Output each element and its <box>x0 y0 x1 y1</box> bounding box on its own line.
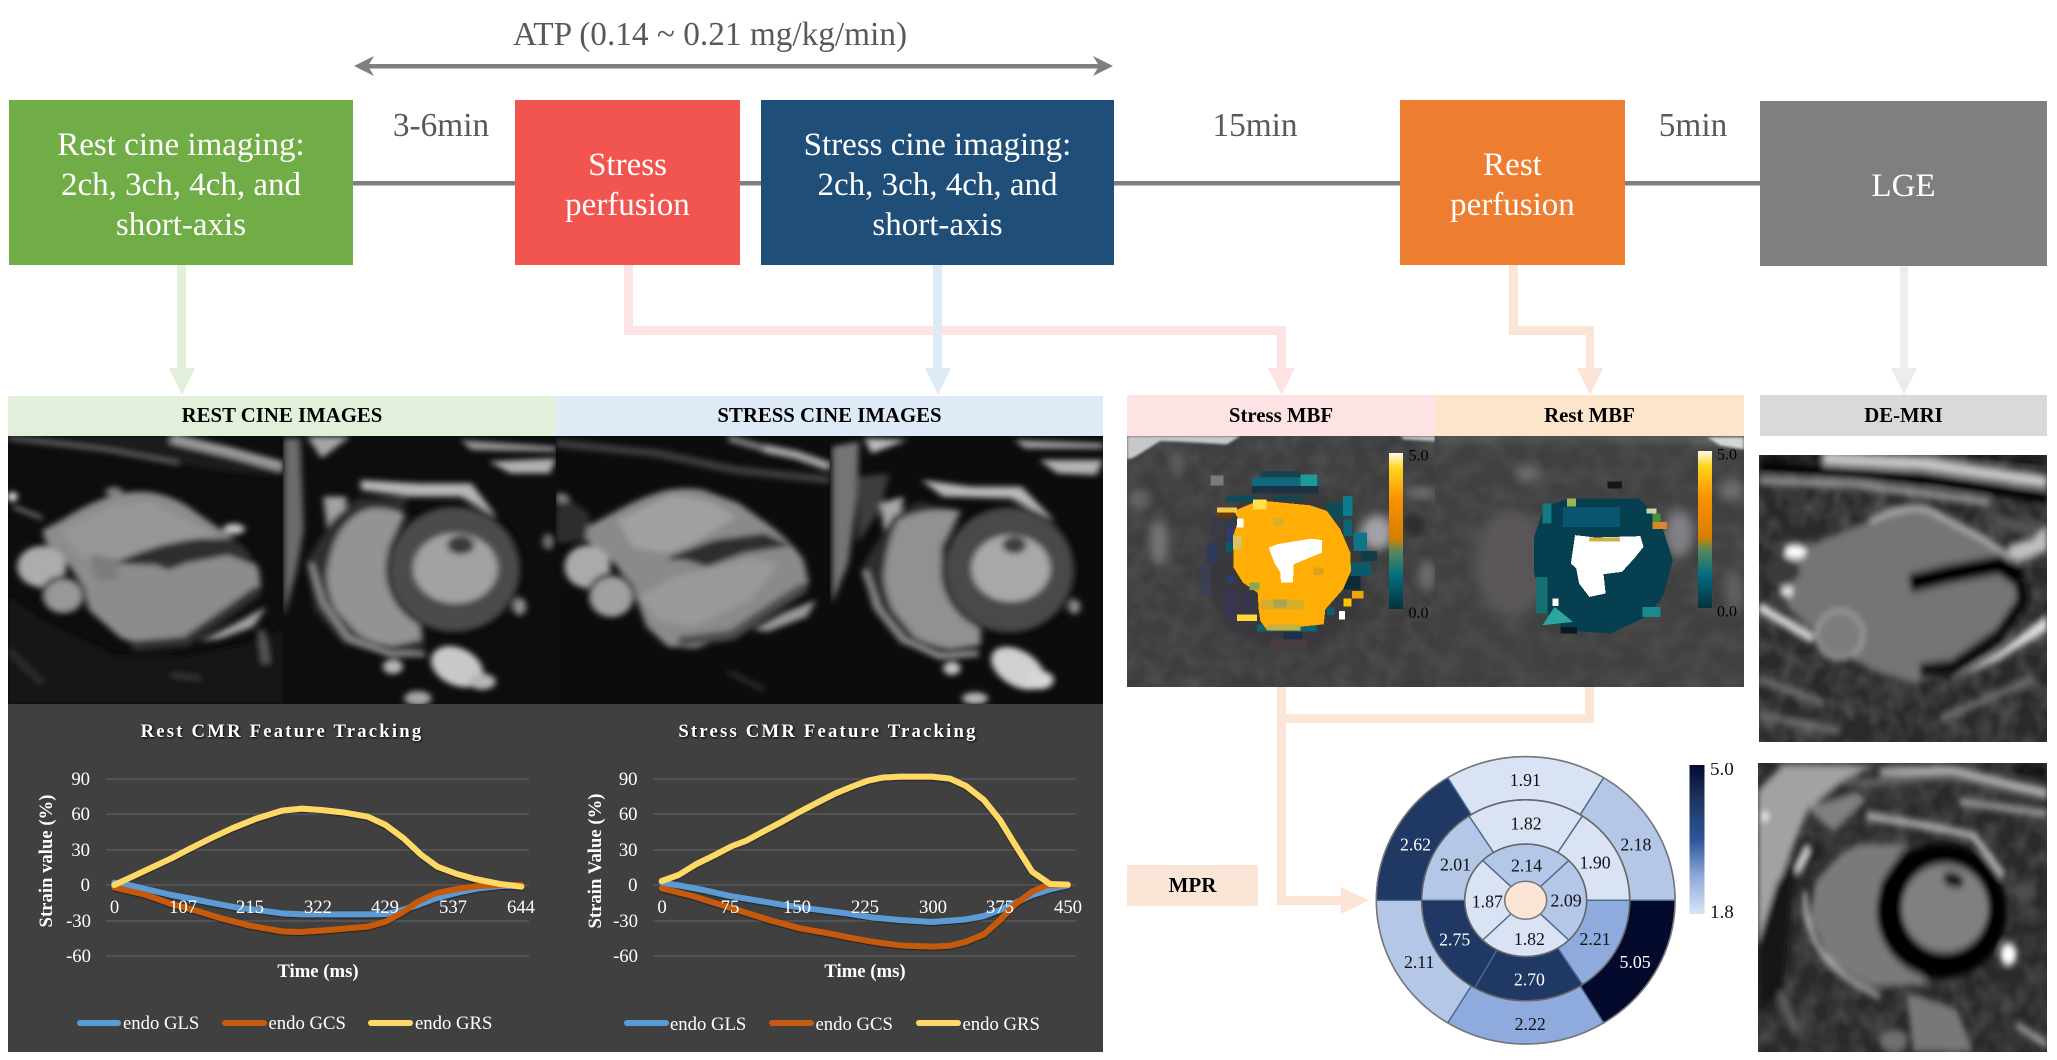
x axis tick labels: 75 <box>721 897 739 918</box>
colorbar: stress MBF: 0.0 <box>1408 605 1428 622</box>
strain curves <box>662 777 1068 947</box>
step: rest cine imaging: Rest cine imaging: <box>57 127 305 163</box>
segment values: 2.09 <box>1551 890 1582 910</box>
x axis title: Time (ms) <box>824 961 906 982</box>
panel: DE-MRI <box>1758 395 2047 1052</box>
step: stress cine imaging: 2ch, 3ch, 4ch, and <box>817 167 1058 203</box>
image: rest four-chamber cine <box>8 436 283 704</box>
legend: endo GRS <box>415 1013 492 1034</box>
x axis tick labels: 0 <box>110 897 119 918</box>
segment values: 1.82 <box>1514 929 1545 949</box>
image: late enhancement long axis <box>1759 455 2047 742</box>
y axis title: Strain Value (%) <box>585 794 606 928</box>
segment values: 1.82 <box>1511 814 1542 834</box>
y axis tick labels: 60 <box>619 804 638 825</box>
step: rest cine imaging <box>9 100 353 265</box>
chart: rest CMR feature tracking <box>8 704 556 1052</box>
legend <box>77 1013 492 1034</box>
label: MPR: MPR <box>1169 873 1216 897</box>
step: stress perfusion: Stress <box>588 147 667 183</box>
step: rest perfusion <box>1400 100 1625 265</box>
segment values: 2.75 <box>1439 930 1470 950</box>
x axis tick labels: 150 <box>783 897 811 918</box>
segment values: 2.18 <box>1620 835 1652 855</box>
x axis tick labels: 225 <box>851 897 879 918</box>
heading: rest cine images <box>8 396 556 436</box>
x axis title: Time (ms) <box>277 961 359 982</box>
arrow: MBF maps to MPR bullseye <box>1277 687 1594 914</box>
panel: stress MBF <box>1127 395 1435 687</box>
legend: endo GCS <box>268 1013 346 1034</box>
timeline connector line <box>353 181 1760 186</box>
chart: MPR bullseye <box>1376 756 1676 1045</box>
arrow: LGE to DE-MRI <box>1891 266 1917 394</box>
segment values: 2.62 <box>1400 835 1431 855</box>
heading: DE-MRI <box>1760 395 2047 436</box>
image: stress MBF map <box>1127 436 1435 687</box>
segment values: 2.70 <box>1514 970 1545 990</box>
legend <box>624 1014 1040 1035</box>
x axis tick labels: 322 <box>304 897 332 918</box>
label: MPR <box>1127 865 1258 906</box>
segment values: 2.21 <box>1580 929 1611 949</box>
heading: stress MBF <box>1127 395 1435 436</box>
arrow: stress cine to images <box>925 265 951 394</box>
colorbar: MPR scale: 1.8 <box>1710 902 1734 923</box>
segment values: 1.91 <box>1510 770 1541 790</box>
y axis tick labels <box>66 769 91 967</box>
y axis tick labels: -30 <box>613 911 638 932</box>
step: stress perfusion <box>515 100 740 265</box>
x axis tick labels <box>110 897 536 918</box>
segment values: 2.01 <box>1440 855 1471 875</box>
x axis tick labels: 644 <box>507 897 536 918</box>
y axis title: Strain value (%) <box>36 795 57 927</box>
segment values: 2.22 <box>1515 1014 1546 1034</box>
heading: stress cine images <box>556 396 1103 436</box>
x axis tick labels: 107 <box>169 897 197 918</box>
y axis tick labels: 0 <box>628 875 638 896</box>
segment values: 2.11 <box>1404 952 1434 972</box>
x axis tick labels: 537 <box>439 897 467 918</box>
step: LGE: LGE <box>1871 168 1936 204</box>
step: rest cine imaging: 2ch, 3ch, 4ch, and <box>61 167 301 203</box>
image: rest MBF map <box>1435 436 1744 687</box>
strain curves <box>114 809 521 932</box>
arrow: rest cine to images <box>169 265 195 395</box>
arrow: stress perfusion to stress MBF <box>624 265 1295 394</box>
y axis tick labels: 30 <box>619 840 638 861</box>
x axis tick labels: 215 <box>236 897 264 918</box>
arrow: rest perfusion to rest MBF <box>1509 265 1603 395</box>
legend: endo GLS <box>670 1014 746 1035</box>
x axis tick labels <box>657 897 1082 918</box>
step: stress cine imaging: Stress cine imaging: <box>804 127 1071 163</box>
label: 3-6min: 3-6min <box>393 107 489 144</box>
heading: stress MBF: Stress MBF <box>1229 404 1333 426</box>
colorbar: MPR scale <box>1690 763 1734 923</box>
chart title: Rest CMR Feature Tracking <box>141 721 423 742</box>
colorbar: rest MBF: 0.0 <box>1717 604 1737 620</box>
heading: rest MBF <box>1435 395 1744 436</box>
colorbar: rest MBF <box>1698 448 1737 620</box>
segment values: 1.90 <box>1580 852 1611 872</box>
y axis tick labels: 30 <box>71 840 90 861</box>
x axis tick labels: 375 <box>986 897 1014 918</box>
y axis tick labels: 90 <box>71 769 90 790</box>
segment values: 2.14 <box>1511 855 1542 875</box>
panel: rest cine images <box>8 396 556 704</box>
legend: endo GCS <box>816 1014 893 1035</box>
heading: stress cine images: STRESS CINE IMAGES <box>717 404 942 427</box>
legend: endo GLS <box>123 1013 199 1034</box>
step: rest cine imaging: short-axis <box>116 207 246 243</box>
colorbar: stress MBF <box>1389 450 1428 622</box>
chart title: Stress CMR Feature Tracking <box>678 721 978 742</box>
panel: rest MBF <box>1435 395 1744 687</box>
y axis tick labels <box>613 769 638 967</box>
step: stress cine imaging: short-axis <box>872 207 1003 243</box>
bullseye segments <box>1376 757 1675 1044</box>
image: late enhancement short axis <box>1758 763 2047 1052</box>
y axis tick labels: 60 <box>71 804 90 825</box>
arrow: ATP duration <box>354 56 1113 76</box>
y axis tick labels: 90 <box>619 769 638 790</box>
x axis tick labels: 450 <box>1054 897 1082 918</box>
segment values: 1.87 <box>1472 891 1503 911</box>
label: 5min: 5min <box>1659 107 1727 144</box>
segment values <box>1400 770 1652 1034</box>
y axis tick labels: -30 <box>66 911 91 932</box>
title: ATP dose: ATP (0.14 ~ 0.21 mg/kg/min) <box>513 16 907 52</box>
segment values: 5.05 <box>1620 952 1651 972</box>
y axis tick labels: -60 <box>613 946 638 967</box>
step: stress cine imaging <box>761 100 1114 265</box>
image: stress four-chamber cine <box>556 436 830 704</box>
x axis tick labels: 0 <box>657 897 667 918</box>
label: 15min: 15min <box>1212 107 1298 144</box>
x axis tick labels: 300 <box>919 897 947 918</box>
chart: stress CMR feature tracking <box>556 704 1103 1052</box>
x axis tick labels: 429 <box>371 897 399 918</box>
y axis tick labels: -60 <box>66 946 91 967</box>
image: rest short-axis cine <box>283 436 556 704</box>
heading: rest cine images: REST CINE IMAGES <box>182 404 382 427</box>
step: stress perfusion: perfusion <box>565 187 690 223</box>
legend: endo GRS <box>962 1014 1040 1035</box>
heading: rest MBF: Rest MBF <box>1544 404 1635 426</box>
step: rest perfusion: Rest <box>1483 147 1542 183</box>
step: rest perfusion: perfusion <box>1450 187 1575 223</box>
image: stress short-axis cine <box>830 436 1103 704</box>
y axis tick labels: 0 <box>81 875 90 896</box>
step: LGE <box>1760 101 2047 266</box>
heading: DE-MRI: DE-MRI <box>1864 404 1943 426</box>
panel: stress cine images <box>556 396 1103 704</box>
